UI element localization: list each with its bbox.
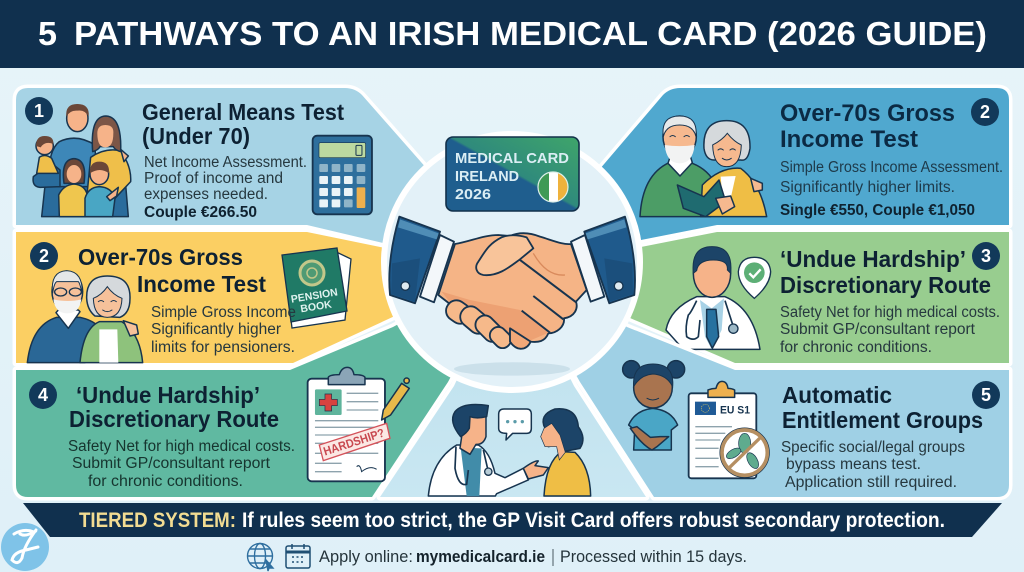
heading: automatic entitlement groups: Automatic <box>782 382 892 408</box>
text: general means test body: expenses needed. <box>144 186 268 203</box>
heading: over-70s gross income test, right: Over-70s Gross <box>780 100 955 127</box>
heading: general means test: (Under 70) <box>142 123 250 149</box>
text: over-70s gross income test body, left: Significantly higher <box>151 321 281 338</box>
number badge 2, left: 2 <box>39 246 49 266</box>
icon: child <box>623 361 685 450</box>
icon: EU S1 document with prohibition sign <box>689 381 769 478</box>
icon: pension book <box>282 248 351 328</box>
title header: PATHWAYS TO AN IRISH MEDICAL CARD (2026 GUIDE) <box>74 15 987 52</box>
footer text: Processed within 15 days. <box>560 548 747 566</box>
text: automatic entitlement body: bypass means test. <box>786 456 921 473</box>
icon: medical card: IRELAND <box>455 168 519 185</box>
heading: general means test <box>142 99 344 149</box>
heading: general means test: General Means Test <box>142 99 344 125</box>
text: automatic entitlement body <box>781 439 965 491</box>
banner: tiered system: If rules seem too strict, the GP Visit Card offers robust secondary protection. <box>242 509 945 532</box>
icon: hardship clipboard and pen <box>308 367 409 481</box>
icon: medical card: 2026 <box>455 186 491 203</box>
heading: over-70s gross income test, left: Income Test <box>137 271 266 297</box>
icon: family <box>33 104 131 217</box>
number badge 3 <box>972 242 1000 270</box>
heading: automatic entitlement groups: Entitlement Groups <box>782 407 983 433</box>
panel: over-70s gross income test, right <box>512 88 1009 262</box>
number badge 2, left <box>30 242 58 270</box>
text: general means test body: Couple €266.50 <box>144 204 257 221</box>
icon: calendar <box>286 544 310 568</box>
heading: undue hardship, right <box>780 246 991 298</box>
panel: undue hardship, right <box>512 232 1009 363</box>
heading: undue hardship, left: Discretionary Route <box>69 406 279 432</box>
heading: undue hardship, left: ‘Undue Hardship’ <box>76 382 260 408</box>
text: undue hardship body, left: for chronic conditions. <box>88 473 243 490</box>
number badge 5 <box>972 381 1000 409</box>
number badge 1: 1 <box>34 101 44 121</box>
number badge 4: 4 <box>38 385 48 405</box>
text: over-70s gross income test body, right: Significantly higher limits. <box>780 179 955 196</box>
heading: over-70s gross income test, right <box>780 100 955 153</box>
heading: undue hardship, left <box>69 382 279 432</box>
text: over-70s gross income test body, right: Single €550, Couple €1,050 <box>780 202 975 219</box>
number badge 1 <box>25 97 53 125</box>
heading: over-70s gross income test, left <box>78 244 266 297</box>
heading: undue hardship, right: Discretionary Route <box>780 272 991 298</box>
title header: 5 <box>38 15 57 52</box>
footer text: mymedicalcard.ie <box>416 548 545 566</box>
icon: EU S1 document with prohibition sign: EU S1 <box>720 404 750 416</box>
text: undue hardship body, right: for chronic conditions. <box>780 339 932 356</box>
icon: older couple <box>27 271 143 363</box>
icon: globe <box>248 544 273 571</box>
banner: tiered system: TIERED SYSTEM: <box>79 509 236 532</box>
logo badge <box>1 523 49 571</box>
icon: doctor and patient talking <box>428 405 591 496</box>
text: general means test body: Proof of income and <box>144 170 283 187</box>
text: over-70s gross income test body, left: Simple Gross Income <box>151 304 296 321</box>
text: undue hardship body, right <box>780 304 1000 356</box>
text: over-70s gross income test body, left: limits for pensioners. <box>151 339 295 356</box>
icon: medical card: MEDICAL CARD <box>455 150 569 167</box>
number badge 3: 3 <box>981 246 991 266</box>
panel: over-70s gross income test, left <box>16 232 512 363</box>
text: undue hardship body, left <box>68 438 295 490</box>
text: over-70s gross income test body, right: Simple Gross Income Assessment. <box>780 159 1003 176</box>
icon: hardship clipboard and pen: HARDSHIP? <box>322 426 386 459</box>
text: general means test body <box>144 154 307 221</box>
text: over-70s gross income test body, left <box>151 304 296 356</box>
icon: doctor with check badge <box>666 247 771 349</box>
text: general means test body: Net Income Assessment. <box>144 154 307 171</box>
panel: undue hardship, left <box>16 262 512 497</box>
text: automatic entitlement body: Specific social/legal groups <box>781 439 965 456</box>
footer text <box>319 548 747 566</box>
icon: pension book: PENSION <box>290 286 339 306</box>
number badge 5: 5 <box>981 385 991 405</box>
footer text: Apply online: <box>319 548 413 566</box>
panel: automatic entitlement groups <box>512 262 1009 497</box>
text: undue hardship body, right: Safety Net for high medical costs. <box>780 304 1000 321</box>
panel: doctor consultation <box>380 262 646 497</box>
number badge 4 <box>29 381 57 409</box>
icon: older couple with pension book <box>640 116 767 217</box>
banner: tiered system <box>23 503 1002 537</box>
icon: handshake <box>389 217 635 376</box>
central circle <box>384 134 640 390</box>
number badge 2, right: 2 <box>980 102 990 122</box>
heading: automatic entitlement groups <box>782 382 983 433</box>
heading: undue hardship, right: ‘Undue Hardship’ <box>780 246 966 272</box>
panel: general means test <box>16 88 512 262</box>
icon: calculator <box>313 136 372 214</box>
number badge 2, right <box>971 98 999 126</box>
text: undue hardship body, right: Submit GP/consultant report <box>780 321 976 338</box>
heading: over-70s gross income test, right: Income Test <box>780 126 918 153</box>
text: undue hardship body, left: Submit GP/consultant report <box>72 455 271 472</box>
icon: pension book: BOOK <box>300 298 333 315</box>
title header <box>0 0 1024 68</box>
text: over-70s gross income test body, right <box>780 159 1003 219</box>
icon: medical card <box>446 137 579 211</box>
text: automatic entitlement body: Application still required. <box>785 474 957 491</box>
heading: over-70s gross income test, left: Over-70s Gross <box>78 244 243 270</box>
text: undue hardship body, left: Safety Net for high medical costs. <box>68 438 295 455</box>
